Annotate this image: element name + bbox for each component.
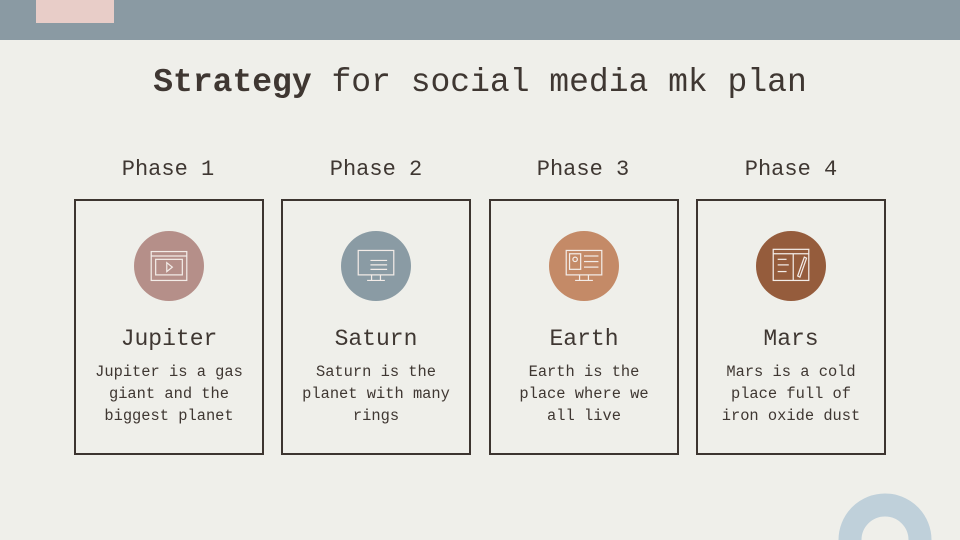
description [722, 363, 860, 425]
description: all live [547, 407, 621, 425]
top bar [0, 0, 960, 40]
description [95, 363, 243, 425]
icon: monitor [341, 231, 411, 301]
phase 1 label: Phase 1 [122, 157, 214, 182]
decorative ring [838, 494, 932, 540]
description: iron oxide dust [722, 407, 860, 425]
phase 2 label: Phase 2 [330, 157, 422, 182]
icon: profile monitor [549, 231, 619, 301]
panel: Saturn [281, 199, 471, 455]
description: Jupiter is a gas [95, 363, 243, 381]
description [302, 363, 450, 425]
icon: notes and pencil [756, 231, 826, 301]
panel: Earth [489, 199, 679, 455]
icon: video window [134, 231, 204, 301]
title: Strategy for social media mk plan [153, 64, 807, 101]
description: rings [353, 407, 399, 425]
name: Jupiter [121, 326, 217, 352]
description: Earth is the [529, 363, 639, 381]
description: Saturn is the [316, 363, 436, 381]
phase 3 label: Phase 3 [537, 157, 629, 182]
description: place where we [519, 385, 649, 403]
description: place full of [731, 385, 851, 403]
description [519, 363, 649, 425]
panel: Jupiter [74, 199, 264, 455]
description: biggest planet [104, 407, 234, 425]
name: Mars [763, 326, 819, 352]
pink accent [36, 0, 114, 23]
name: Earth [549, 326, 618, 352]
description: Mars is a cold [726, 363, 856, 381]
name: Saturn [335, 326, 417, 352]
panel: Mars [696, 199, 886, 455]
phase 4 label: Phase 4 [745, 157, 837, 182]
description: planet with many [302, 385, 450, 403]
description: giant and the [109, 385, 229, 403]
